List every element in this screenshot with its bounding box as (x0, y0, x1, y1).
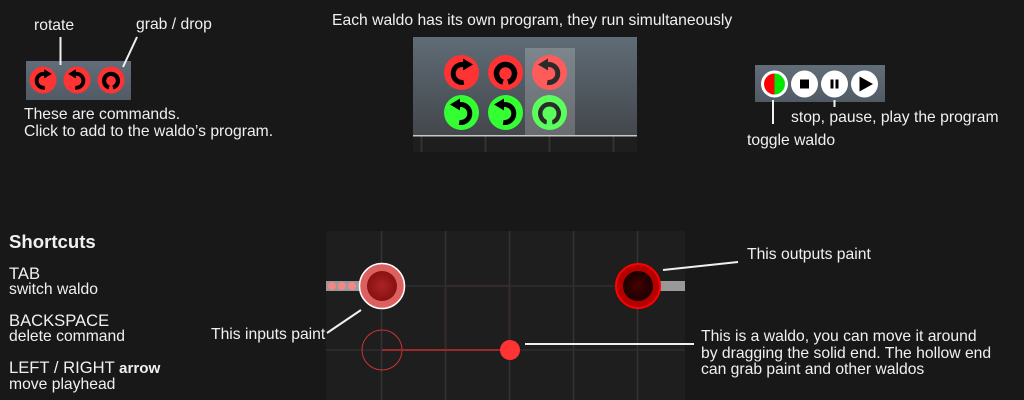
panel: game grid (326, 231, 685, 400)
pointer: waldo (525, 343, 694, 345)
icon: grab (98, 67, 124, 93)
heading: shortcuts: Shortcuts (9, 231, 96, 252)
text: waldo explanation: This is a waldo, you can move it around (701, 328, 977, 345)
icon: play (851, 70, 878, 98)
text: waldo explanation: can grab paint and other waldos (701, 361, 924, 378)
label: inputs paint: This inputs paint (211, 326, 326, 343)
panel: playback controls (755, 65, 885, 102)
icon: stop (791, 70, 818, 98)
text: waldo explanation: by dragging the solid end. The hollow end (701, 345, 991, 362)
text block: shortcuts (9, 231, 161, 393)
label: stop, pause, play: stop, pause, play the program (791, 109, 999, 126)
pointer: rotate (60, 37, 62, 65)
pointer: pause (834, 100, 836, 107)
heading: simultaneous programs: Each waldo has its own program, they run simultaneously (332, 12, 732, 29)
pointer: outputs paint (663, 262, 738, 270)
icon: red grab (488, 55, 523, 90)
icon: pause (821, 70, 848, 98)
waldo (362, 330, 520, 370)
label: outputs paint: This outputs paint (747, 246, 871, 263)
shortcut: BACKSPACE: delete command (9, 328, 125, 345)
icon: green drop, active (532, 95, 567, 130)
shortcut: arrows: arrow (119, 360, 161, 377)
icon: green rotate counter-clockwise (488, 95, 523, 130)
label: toggle waldo: toggle waldo (747, 132, 835, 149)
shortcut: arrows: move playhead (9, 376, 115, 393)
pointer: grab / drop (123, 37, 137, 67)
text: commands explanation: These are commands. (24, 106, 180, 123)
text: commands explanation: Click to add to the waldo’s program. (24, 123, 273, 140)
shortcut: TAB: TAB (9, 264, 40, 283)
icon: toggle waldo (761, 70, 788, 98)
icon: green rotate counter-clockwise (444, 95, 479, 130)
pointer: inputs paint (327, 310, 361, 333)
panel: programs (413, 37, 637, 152)
shortcut: BACKSPACE: BACKSPACE (9, 311, 109, 330)
icon: red rotate clockwise (444, 55, 479, 90)
pointer: toggle waldo (772, 100, 774, 124)
icon: rotate counter-clockwise (64, 67, 90, 93)
label: grab / drop: grab / drop (136, 16, 212, 33)
panel: commands (26, 61, 131, 100)
shortcut: arrows: LEFT / RIGHT (9, 358, 115, 377)
input paint emitter (326, 264, 404, 308)
label: rotate: rotate (34, 17, 74, 34)
icon: rotate clockwise (30, 67, 56, 93)
shortcut: TAB: switch waldo (9, 281, 98, 298)
icon: red rotate counter-clockwise, active (532, 55, 567, 90)
output paint receiver (616, 264, 685, 308)
